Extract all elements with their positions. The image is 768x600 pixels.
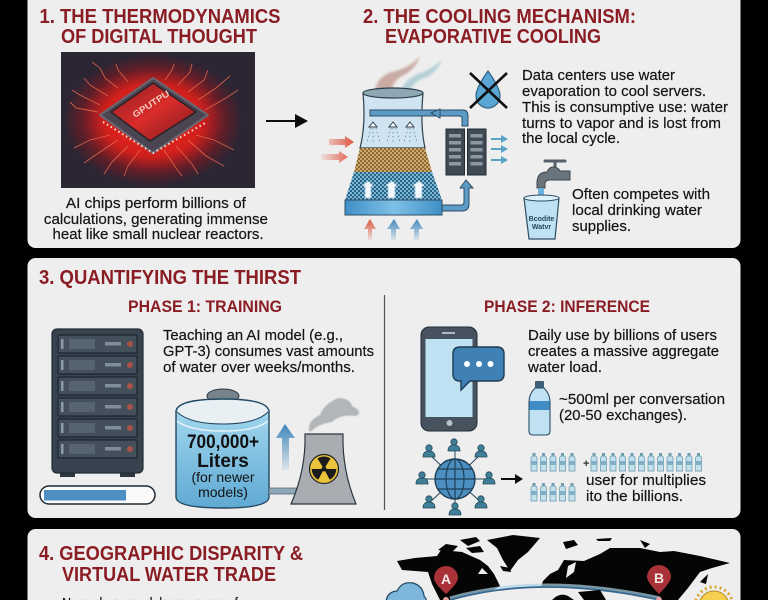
heading: cooling mechanism: 2. THE COOLING MECHANISM: bbox=[363, 5, 636, 28]
text: training description: Teaching an AI model (e.g., bbox=[163, 327, 343, 344]
text: drinking water competition: local drinking water bbox=[572, 202, 702, 219]
text: drinking water competition: supplies. bbox=[572, 218, 631, 235]
text: 500ml per conversation: ~500ml per conversation bbox=[559, 391, 725, 408]
arrow: users to bottles bbox=[501, 474, 523, 484]
heading: phase 1: PHASE 1: TRAINING bbox=[128, 297, 282, 316]
panel: quantifying the thirst bbox=[28, 258, 740, 518]
chart: water tank 700,000+ liters: 700,000+ bbox=[187, 432, 259, 453]
icon: rain cloud bbox=[386, 583, 427, 600]
heading: geographic disparity and virtual water trade: VIRTUAL WATER TRADE bbox=[62, 563, 276, 586]
heading: thermodynamics of digital thought: 1. THE THERMODYNAMICS bbox=[40, 5, 280, 28]
chart: water tank 700,000+ liters: models) bbox=[198, 484, 248, 500]
icon: water bottle bbox=[529, 381, 550, 435]
text: user multiplies: ito the billions. bbox=[586, 488, 683, 505]
marker: site B bbox=[647, 565, 671, 600]
arrow: upward water flow bbox=[276, 424, 295, 470]
icon: globe network of users bbox=[416, 439, 495, 515]
heading: thermodynamics of digital thought bbox=[40, 5, 280, 48]
text: training description: of water over weeks/months. bbox=[163, 359, 355, 376]
text: drinking water competition: Often competes with bbox=[572, 186, 710, 203]
heading: phase 2: PHASE 2: INFERENCE bbox=[484, 297, 650, 316]
text: evaporation explanation: the local cycle. bbox=[522, 130, 620, 147]
text: evaporation explanation: This is consumptive use: water bbox=[522, 99, 728, 116]
text: evaporation explanation: turns to vapor and is lost from bbox=[522, 115, 721, 132]
icon: rows of water bottles: + bbox=[583, 458, 589, 470]
heading: quantifying the thirst: 3. QUANTIFYING THE THIRST bbox=[39, 266, 301, 289]
text: inference description: creates a massive aggregate bbox=[528, 343, 719, 360]
icon: faucet filling glass of water: Bcodite bbox=[529, 216, 554, 223]
icon: rows of water bottles bbox=[531, 453, 702, 501]
text: evaporation explanation: evaporation to cool servers. bbox=[522, 83, 706, 100]
text: 500ml per conversation: (20-50 exchanges). bbox=[559, 407, 687, 424]
icon: server rack bbox=[52, 329, 143, 477]
icon: sun bbox=[695, 587, 733, 600]
diagram: cooling tower bbox=[321, 56, 473, 240]
panel: geographic disparity bbox=[28, 529, 740, 600]
map: world with sites A and B bbox=[397, 535, 730, 600]
chart: water tank 700,000+ liters bbox=[176, 389, 269, 508]
heading: thermodynamics of digital thought: OF DIGITAL THOUGHT bbox=[61, 25, 257, 48]
heading: cooling mechanism: EVAPORATIVE COOLING bbox=[385, 25, 601, 48]
marker: site A: A bbox=[441, 571, 451, 587]
icon: faucet filling glass of water bbox=[524, 161, 570, 239]
panel: thermodynamics and cooling bbox=[28, 0, 740, 248]
text: inference description: Daily use by billions of users bbox=[528, 327, 717, 344]
progress bar bbox=[40, 486, 155, 504]
arrow: heat to cooling bbox=[266, 114, 308, 128]
marker: site A bbox=[434, 566, 458, 600]
icon: faucet filling glass of water: Watvr bbox=[532, 224, 551, 231]
chart: water tank 700,000+ liters: (for newer bbox=[191, 469, 255, 485]
marker: site B: B bbox=[654, 570, 664, 586]
image: overheating AI chip: GPUTPU bbox=[131, 88, 171, 120]
icon: crossed-out water drop bbox=[470, 71, 507, 108]
text: AI chips caption: heat like small nuclear reactors. bbox=[52, 226, 264, 243]
icon: nuclear cooling tower bbox=[269, 398, 359, 504]
text: user multiplies: user for multiplies bbox=[586, 472, 706, 489]
chart: water tank 700,000+ liters: Liters bbox=[197, 451, 249, 472]
text: training description: GPT-3) consumes vast amounts bbox=[163, 343, 374, 360]
heading: cooling mechanism bbox=[363, 5, 636, 48]
icon: smartphone with chat bubble bbox=[421, 327, 504, 431]
text: inference description: water load. bbox=[527, 359, 602, 376]
image: overheating AI chip bbox=[61, 52, 255, 188]
text: evaporation explanation: Data centers use water bbox=[522, 67, 675, 84]
text: AI chips caption: AI chips perform billions of bbox=[66, 195, 247, 212]
heading: geographic disparity and virtual water trade: 4. GEOGRAPHIC DISPARITY & bbox=[39, 542, 303, 565]
heading: geographic disparity and virtual water trade bbox=[39, 542, 303, 586]
text: AI chips caption: calculations, generating immense bbox=[44, 211, 268, 228]
icon: server cabinets with heat arrows bbox=[446, 129, 508, 175]
